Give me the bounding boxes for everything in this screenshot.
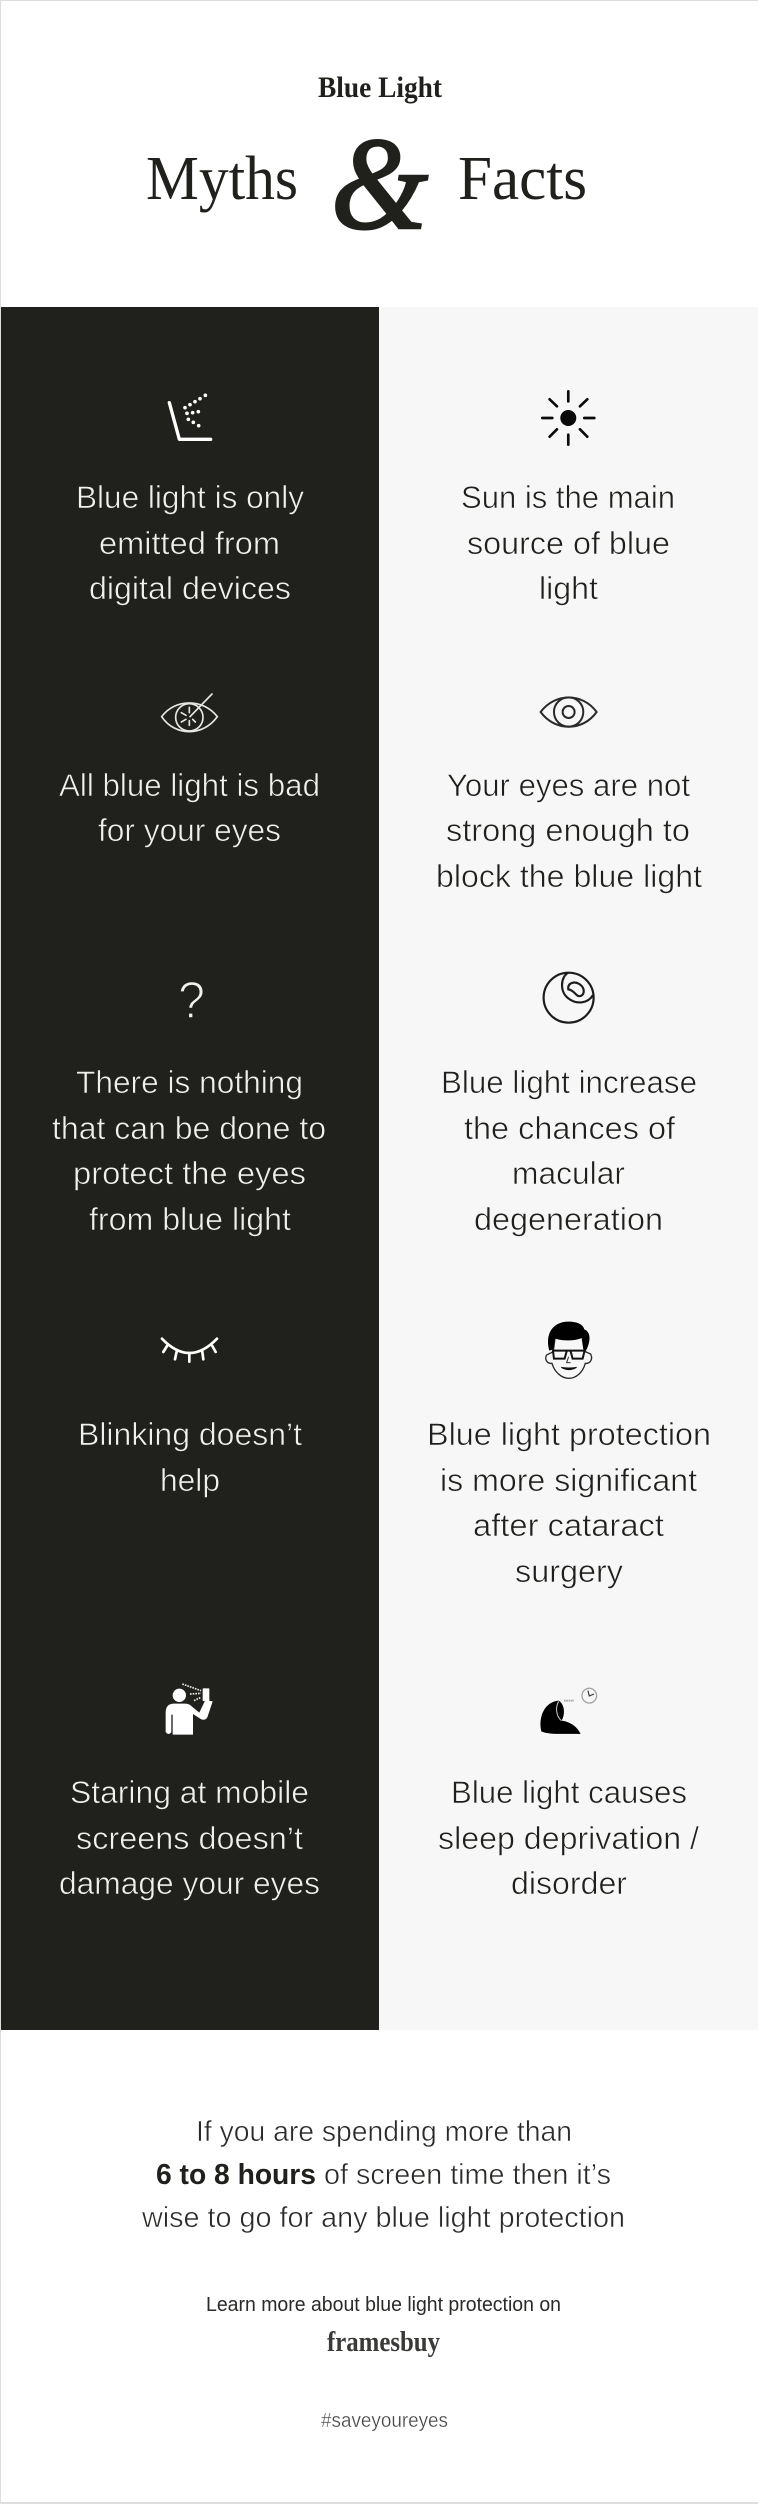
callout: screen time advice: 6 to 8 hours	[156, 2159, 316, 2191]
fact 2 text	[436, 767, 702, 894]
myth 5 text: screens doesn’t	[76, 1820, 303, 1856]
myth 4 text: help	[160, 1462, 220, 1498]
myth 3 text: There is nothing	[76, 1064, 303, 1100]
myth 1 text	[76, 479, 304, 606]
icon: man with glasses	[546, 1322, 592, 1378]
fact 3 text	[441, 1064, 697, 1237]
icon: macula	[544, 973, 594, 1023]
myth 3 text: protect the eyes	[73, 1155, 306, 1191]
myth 1 text: Blue light is only	[76, 479, 304, 515]
fact 3 text: macular	[512, 1155, 625, 1191]
myth 5 text: Staring at mobile	[70, 1774, 309, 1810]
callout: screen time advice: If you are spending more than	[196, 2116, 572, 2148]
myth 2 text	[59, 767, 320, 848]
panel: facts	[379, 307, 758, 2030]
icon: sleeper and clock	[540, 1688, 597, 1734]
myth 3 text: that can be done to	[52, 1110, 326, 1146]
logo: framesbuy: framesbuy	[327, 2326, 440, 2358]
myth 5 text	[59, 1774, 320, 1901]
heading: Facts: Facts	[458, 145, 587, 213]
title	[146, 71, 587, 257]
myth 3 text	[52, 1064, 326, 1237]
myth 4 text	[78, 1416, 302, 1498]
text: hashtag: #saveyoureyes	[321, 2410, 448, 2432]
fact 4 text: is more significant	[440, 1462, 697, 1498]
icon: closed eye	[162, 1339, 217, 1362]
panel: myths	[1, 307, 379, 2030]
callout: screen time advice: wise to go for any blue light protection	[141, 2202, 625, 2234]
icon: screen emitting light	[169, 393, 211, 439]
fact 1 text: Sun is the main	[461, 479, 675, 515]
icon: sun	[542, 391, 594, 445]
fact 1 text	[461, 479, 675, 606]
myth 5 text: damage your eyes	[59, 1865, 320, 1901]
callout: screen time advice	[141, 2116, 625, 2234]
myth 3 text: from blue light	[89, 1201, 291, 1237]
heading: Blue Light: Blue Light	[318, 71, 442, 104]
fact 5 text: Blue light causes	[451, 1774, 687, 1810]
myth 2 text: for your eyes	[98, 812, 281, 848]
fact 3 text: the chances of	[464, 1110, 675, 1146]
myth 4 text: Blinking doesn’t	[78, 1416, 302, 1452]
callout: screen time advice: of screen time then it’s	[324, 2159, 611, 2191]
myth 1 text: digital devices	[89, 570, 291, 606]
fact 4 text	[427, 1416, 711, 1589]
fact 2 text: Your eyes are not	[447, 767, 690, 803]
fact 1 text: light	[539, 570, 598, 606]
fact 5 text: sleep deprivation /	[438, 1820, 699, 1856]
fact 5 text: disorder	[511, 1865, 627, 1901]
fact 2 text: block the blue light	[436, 858, 702, 894]
fact 3 text: degeneration	[474, 1201, 663, 1237]
heading: ampersand: &	[331, 110, 428, 257]
myth 2 text: All blue light is bad	[59, 767, 320, 803]
fact 3 text: Blue light increase	[441, 1064, 697, 1100]
icon: question mark: ?	[178, 972, 205, 1030]
fact 2 text: strong enough to	[446, 812, 690, 848]
fact 4 text: Blue light protection	[427, 1416, 711, 1452]
fact 5 text	[438, 1774, 699, 1901]
icon: eye with ray	[162, 694, 217, 732]
icon: person staring at phone	[166, 1684, 213, 1735]
heading: Myths: Myths	[146, 145, 298, 213]
fact 4 text: surgery	[515, 1553, 623, 1589]
fact 1 text: source of blue	[467, 525, 670, 561]
icon: eye	[541, 697, 597, 727]
text: learn more: Learn more about blue light protection on	[206, 2294, 561, 2316]
myth 1 text: emitted from	[99, 525, 280, 561]
fact 4 text: after cataract	[473, 1507, 664, 1543]
